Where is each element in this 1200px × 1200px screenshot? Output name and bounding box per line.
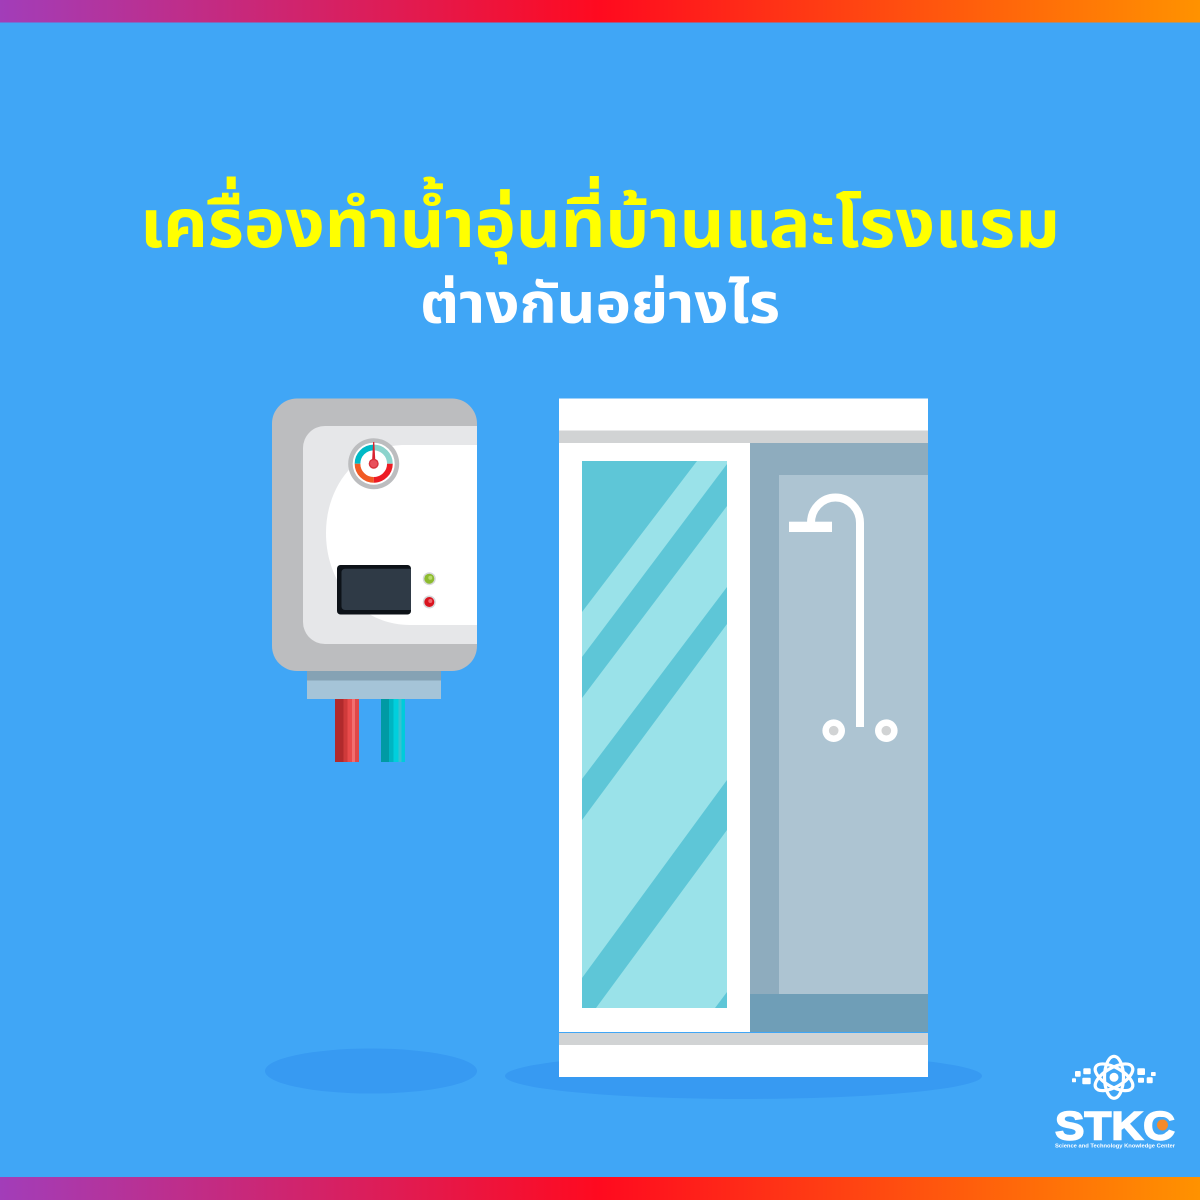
heater highlight: [326, 445, 477, 625]
bottom gradient bar: [0, 1177, 1200, 1200]
heater front panel: [303, 426, 477, 644]
cabin bottom frame: [559, 1033, 928, 1077]
icon: water heater: [272, 398, 477, 762]
temperature gauge: [348, 438, 399, 489]
red indicator light: [423, 596, 436, 608]
heater body: [272, 398, 477, 671]
shower head and pipe: [789, 498, 860, 727]
shower cabin shadow: [505, 1053, 982, 1099]
cold water pipe: [381, 699, 405, 762]
left shower knob: [822, 719, 845, 742]
cabin inner wall: [779, 475, 928, 994]
logo wordmark: STKC: [1055, 1104, 1175, 1148]
top gradient bar: [0, 0, 1200, 22]
cabin back wall: [750, 443, 928, 995]
green indicator light: [423, 572, 436, 585]
subtitle: ต่างกันอย่างไร: [420, 272, 780, 335]
icon: shower cabin: [559, 398, 928, 1077]
logo tagline: Science and Technology Knowledge Center: [1055, 1144, 1176, 1150]
title: เครื่องทำน้ำอุ่นที่บ้านและโรงแรม: [140, 176, 1060, 265]
right shower knob: [875, 719, 898, 742]
glass door: [582, 461, 727, 1008]
hot water pipe: [335, 699, 359, 762]
cabin floor tray: [750, 994, 928, 1032]
logo atom mark: [1091, 1056, 1137, 1098]
logo pixel squares: [1072, 1068, 1156, 1084]
water heater shadow: [265, 1048, 477, 1094]
door frame: [559, 443, 750, 1032]
STKC logo: [1055, 1056, 1176, 1150]
heater mounting bracket: [307, 671, 441, 699]
logo orange dot: [1154, 1117, 1170, 1133]
cabin top frame: [559, 398, 928, 443]
control screen: [337, 565, 411, 614]
